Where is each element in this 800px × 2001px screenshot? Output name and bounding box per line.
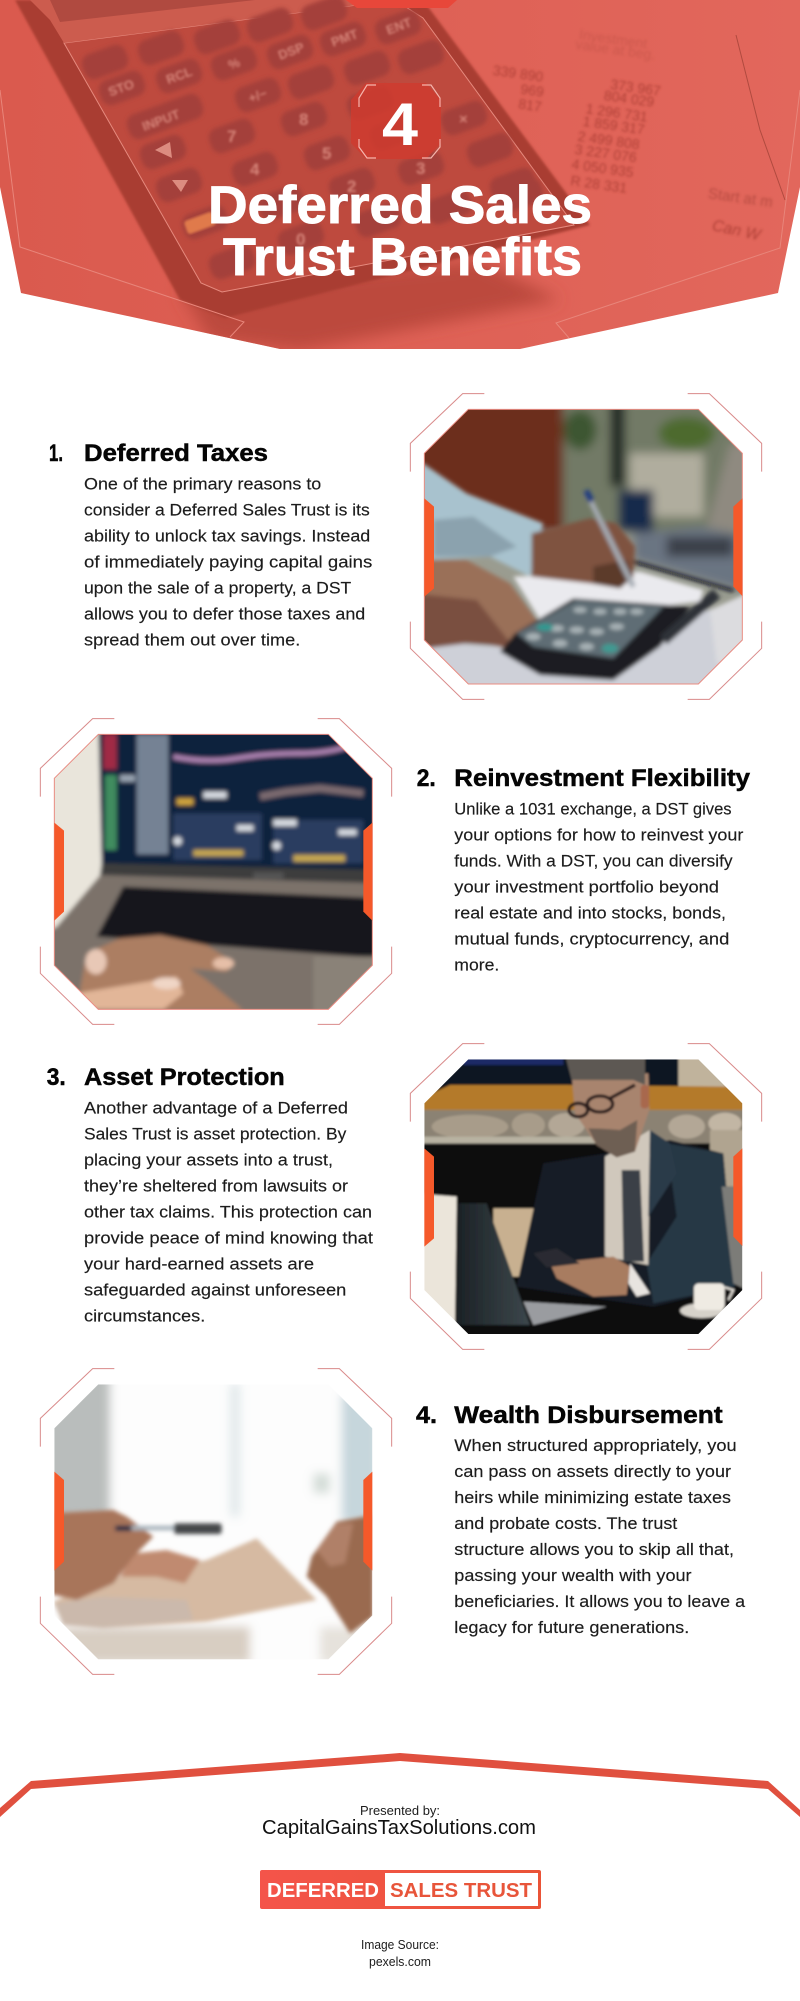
header banner with calculator photo: INPUT xyxy=(140,107,182,134)
body 4: passing your wealth with your xyxy=(454,1567,692,1585)
body 2: more. xyxy=(454,956,499,974)
body 3: Another advantage of a Deferred xyxy=(84,1100,348,1118)
printed figures on paper: 2 499 808 xyxy=(577,128,641,152)
heading 4: Wealth Disbursement xyxy=(454,1402,723,1429)
title: Trust Benefits xyxy=(223,228,582,287)
header banner with calculator photo: ENT xyxy=(384,15,414,38)
printed figures on paper: 373 967 xyxy=(609,76,662,99)
body 1: spread them out over time. xyxy=(84,632,300,650)
body 1 xyxy=(84,476,372,650)
header banner with calculator photo xyxy=(0,0,800,350)
body 1: One of the primary reasons to xyxy=(84,476,321,494)
heading 3: 3. xyxy=(47,1064,66,1091)
printed figures on paper: 969 xyxy=(520,81,545,100)
printed figures on paper: 4 050 935 xyxy=(571,156,635,180)
body 3: safeguarded against unforeseen xyxy=(84,1282,346,1300)
header banner with calculator photo: STO xyxy=(106,76,136,99)
body 2: funds. With a DST, you can diversify xyxy=(454,852,733,870)
logo: Deferred Sales Trust: DEFERRED xyxy=(267,1880,379,1902)
body 3: placing your assets into a trust, xyxy=(84,1152,333,1170)
header banner with calculator photo: 5 xyxy=(322,144,331,163)
body 1: ability to unlock tax savings. Instead xyxy=(84,528,370,546)
body 2: your investment portfolio beyond xyxy=(454,878,719,896)
printed figures on paper: 1 859 317 xyxy=(582,113,646,137)
image source: pexels.com xyxy=(369,1955,431,1969)
header banner with calculator photo: 8 xyxy=(299,110,308,129)
orange side tabs xyxy=(54,823,372,921)
body 4: legacy for future generations. xyxy=(454,1619,689,1637)
printed figures on paper xyxy=(492,26,774,245)
image source: Image Source: xyxy=(361,1938,439,1952)
header banner with calculator photo: 4 xyxy=(250,160,260,179)
photo frame 3: businessman with phone and laptop xyxy=(410,1044,762,1349)
logo: Deferred Sales Trust: SALES TRUST xyxy=(390,1880,532,1902)
body 3: Sales Trust is asset protection. By xyxy=(84,1126,347,1144)
body 1: consider a Deferred Sales Trust is its xyxy=(84,502,370,520)
header banner with calculator photo: PMT xyxy=(329,26,360,50)
body 4: can pass on assets directly to your xyxy=(454,1463,732,1481)
printed figures on paper: Can W xyxy=(711,217,764,245)
heading 2: 2. xyxy=(417,765,436,792)
header banner with calculator photo: +/− xyxy=(246,85,269,106)
panel: benefit 4 text xyxy=(416,1402,746,1637)
body 2: Unlike a 1031 exchange, a DST gives xyxy=(454,800,732,818)
panel: benefit 2 text xyxy=(417,765,751,974)
header banner with calculator photo: 3 xyxy=(416,159,425,178)
body 1: allows you to defer those taxes and xyxy=(84,606,365,624)
orange side tabs xyxy=(424,498,742,597)
photo frame 1: hands with calculator xyxy=(410,394,762,699)
printed figures on paper: 804 029 xyxy=(603,87,655,110)
printed figures on paper: 339 890 xyxy=(492,62,545,85)
heading 1: 1. xyxy=(49,440,63,467)
body 3: your hard-earned assets are xyxy=(84,1256,314,1274)
body 4: beneficiaries. It allows you to leave a xyxy=(454,1593,746,1611)
title xyxy=(208,176,592,287)
body 3: provide peace of mind knowing that xyxy=(84,1230,373,1248)
heading 3: Asset Protection xyxy=(84,1064,285,1091)
printed figures on paper: R 28 331 xyxy=(570,172,628,196)
orange side tabs xyxy=(424,1148,742,1247)
body 2: mutual funds, cryptocurrency, and xyxy=(454,930,729,948)
body 2: your options for how to reinvest your xyxy=(454,826,744,844)
heading 4: 4. xyxy=(416,1402,437,1429)
body 3: they’re sheltered from lawsuits or xyxy=(84,1178,349,1196)
presented by: Presented by: xyxy=(360,1804,440,1818)
header banner with calculator photo: DSP xyxy=(276,39,307,63)
header banner with calculator photo: 2 xyxy=(347,177,356,196)
body 3: other tax claims. This protection can xyxy=(84,1204,372,1222)
printed figures on paper: Start at m xyxy=(707,185,774,211)
body 4: and probate costs. The trust xyxy=(454,1515,678,1533)
panel: benefit 1 text xyxy=(49,440,372,650)
title: Deferred Sales xyxy=(208,176,592,235)
header banner with calculator photo: × xyxy=(459,111,468,128)
image source xyxy=(361,1938,439,1969)
printed figures on paper: value at beg. xyxy=(575,36,656,63)
website: CapitalGainsTaxSolutions.com xyxy=(262,1817,536,1839)
header banner with calculator photo: 0 xyxy=(296,230,305,249)
logo: Deferred Sales Trust xyxy=(260,1870,541,1909)
body 1: upon the sale of a property, a DST xyxy=(84,580,351,598)
panel: benefit 3 text xyxy=(47,1064,373,1326)
body 2 xyxy=(454,800,744,974)
body 3 xyxy=(84,1100,373,1326)
heading 1: Deferred Taxes xyxy=(84,440,268,467)
body 4 xyxy=(454,1437,746,1637)
photo frame 4: handing over a document and pen xyxy=(40,1369,392,1674)
header banner with calculator photo: RCL xyxy=(164,64,194,87)
body 4: heirs while minimizing estate taxes xyxy=(454,1489,731,1507)
number badge: 4 xyxy=(382,91,419,158)
footer chevron band xyxy=(0,1753,800,1817)
orange side tabs xyxy=(54,1472,372,1571)
heading 2: Reinvestment Flexibility xyxy=(454,765,751,792)
printed figures on paper: 1 296 731 xyxy=(585,100,649,125)
body 4: When structured appropriately, you xyxy=(454,1437,737,1455)
body 2: real estate and into stocks, bonds, xyxy=(454,904,726,922)
photo frame 2: laptop with trading charts xyxy=(40,719,392,1024)
printed figures on paper: 817 xyxy=(517,95,543,115)
printed figures on paper: 3 227 076 xyxy=(574,141,638,165)
number badge xyxy=(351,83,441,159)
body 1: of immediately paying capital gains xyxy=(84,554,372,572)
header banner with calculator photo: 7 xyxy=(227,127,236,146)
header banner with calculator photo: % xyxy=(226,54,242,73)
printed figures on paper: Investment xyxy=(578,26,648,51)
top tab xyxy=(346,0,457,8)
body 4: structure allows you to skip all that, xyxy=(454,1541,734,1559)
body 3: circumstances. xyxy=(84,1308,205,1326)
